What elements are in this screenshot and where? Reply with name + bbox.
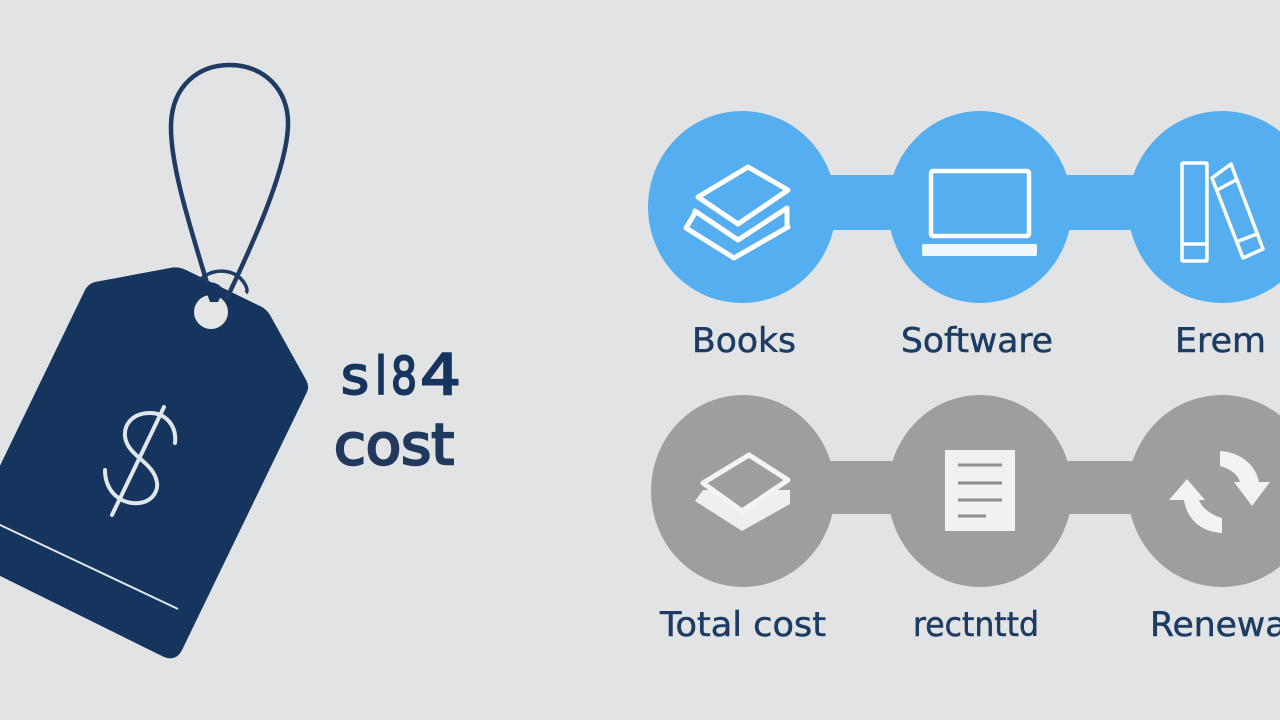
icon: renewal arrows xyxy=(1169,451,1270,533)
label: exam: Erem xyxy=(1175,321,1266,361)
price tag with string xyxy=(0,65,308,658)
tag hole xyxy=(194,295,228,329)
top row: blue chain xyxy=(648,111,1280,303)
bottom row labels xyxy=(659,605,1280,645)
cost label xyxy=(334,343,461,478)
grey connector bar xyxy=(742,461,1280,514)
label: books: Books xyxy=(692,321,796,361)
cost value: 4 xyxy=(420,343,461,408)
circle: renewal xyxy=(1128,395,1280,587)
cost value: s xyxy=(341,347,369,407)
icon: leaning books xyxy=(1182,163,1263,261)
top row labels xyxy=(692,321,1266,361)
label: software: Software xyxy=(901,321,1053,361)
icon: document xyxy=(945,450,1015,531)
cost word: cost xyxy=(334,413,454,478)
cost value xyxy=(341,343,461,408)
string knot xyxy=(199,271,247,302)
circle: document xyxy=(888,395,1072,587)
label: rectnttd: rectnttd xyxy=(913,605,1039,645)
bottom row: grey chain xyxy=(651,395,1280,587)
circle: software xyxy=(888,111,1072,303)
circle: exam xyxy=(1128,111,1280,303)
label: total cost: Total cost xyxy=(659,605,826,645)
cost value: 8 xyxy=(391,347,417,407)
circle: total cost xyxy=(651,395,835,587)
icon: layered sheets xyxy=(695,455,790,531)
tag body xyxy=(0,267,308,658)
tag bottom line xyxy=(0,524,178,609)
icon: laptop xyxy=(922,171,1037,256)
cost value: l xyxy=(375,347,387,407)
icon: book stack xyxy=(686,167,788,258)
blue connector bar xyxy=(742,175,1280,230)
tag string loop xyxy=(171,65,288,300)
dollar sign icon xyxy=(105,407,175,515)
circle: books xyxy=(648,111,836,303)
